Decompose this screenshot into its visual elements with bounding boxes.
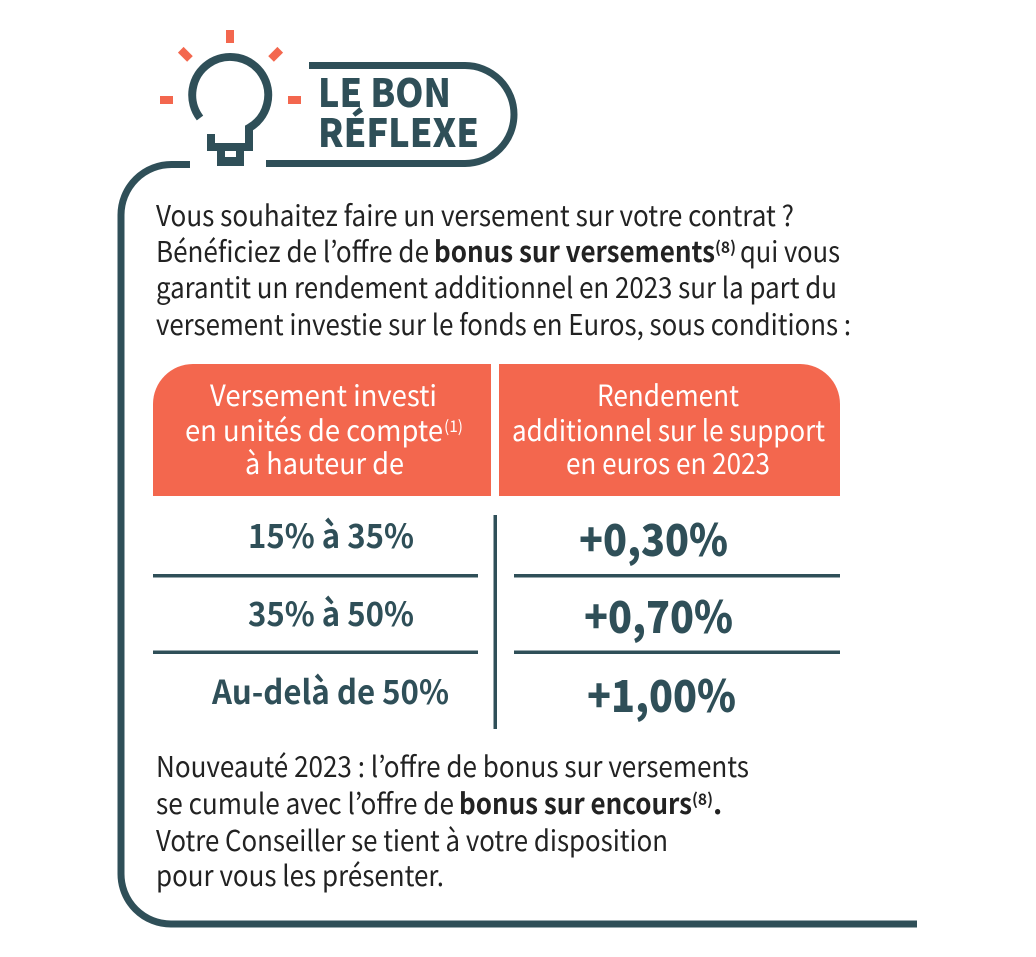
text block: closing note: pour vous les présenter. bbox=[156, 854, 444, 895]
text block: intro: bonus sur versements bbox=[434, 230, 715, 271]
text block: intro: (8) bbox=[715, 234, 736, 258]
text block: closing note bbox=[156, 745, 749, 895]
table column: additional yields: +0,70% bbox=[584, 582, 733, 646]
table header: right: additionnel sur le support bbox=[512, 408, 825, 450]
text block: closing note: bonus sur encours bbox=[459, 782, 692, 823]
table header: left: en unités de compte bbox=[185, 408, 443, 450]
table column: investment ranges: 35% à 50% bbox=[248, 588, 414, 636]
text block: closing note: se cumule avec l’offre de bbox=[156, 782, 454, 823]
title: LE BON bbox=[318, 63, 451, 119]
text block: intro: Bénéficiez de l’offre de bbox=[156, 230, 429, 271]
table grid lines bbox=[153, 515, 840, 729]
table column: investment ranges bbox=[211, 510, 449, 714]
text block: intro: Vous souhaitez faire un versement sur votre contrat ? bbox=[156, 194, 794, 235]
title bbox=[318, 63, 479, 159]
title: RÉFLEXE bbox=[318, 103, 479, 159]
table header: right: Rendement bbox=[597, 373, 739, 415]
panel: le bon réflexe frame bbox=[121, 164, 917, 924]
text block: closing note: Votre Conseiller se tient à votre disposition bbox=[156, 819, 668, 860]
table column: investment ranges: 15% à 35% bbox=[248, 510, 414, 558]
table column: additional yields: +1,00% bbox=[587, 661, 736, 725]
table column: investment ranges: Au-delà de 50% bbox=[211, 666, 449, 714]
text block: intro bbox=[156, 194, 851, 344]
table header: right: en euros en 2023 bbox=[566, 441, 770, 483]
title pill outline bbox=[266, 66, 514, 164]
text block: closing note: Nouveauté 2023 : l’offre de bonus sur versements bbox=[156, 745, 749, 786]
text block: intro: qui vous bbox=[740, 230, 840, 271]
text block: intro: versement investie sur le fonds en Euros, sous conditions : bbox=[156, 303, 851, 344]
text block: closing note: . bbox=[713, 782, 722, 823]
table column: additional yields: +0,30% bbox=[579, 505, 728, 569]
table header: left: Versement investi bbox=[210, 373, 437, 415]
icon: light bulb bbox=[160, 30, 301, 166]
text block: intro: garantit un rendement additionnel en 2023 sur la part du bbox=[156, 266, 837, 307]
text block: closing note: (8) bbox=[692, 786, 713, 810]
table header: left: à hauteur de bbox=[245, 441, 404, 483]
table header: left bbox=[153, 364, 491, 496]
table header: left: (1) bbox=[444, 413, 463, 437]
table header: right bbox=[499, 364, 840, 496]
table column: additional yields bbox=[579, 505, 736, 725]
